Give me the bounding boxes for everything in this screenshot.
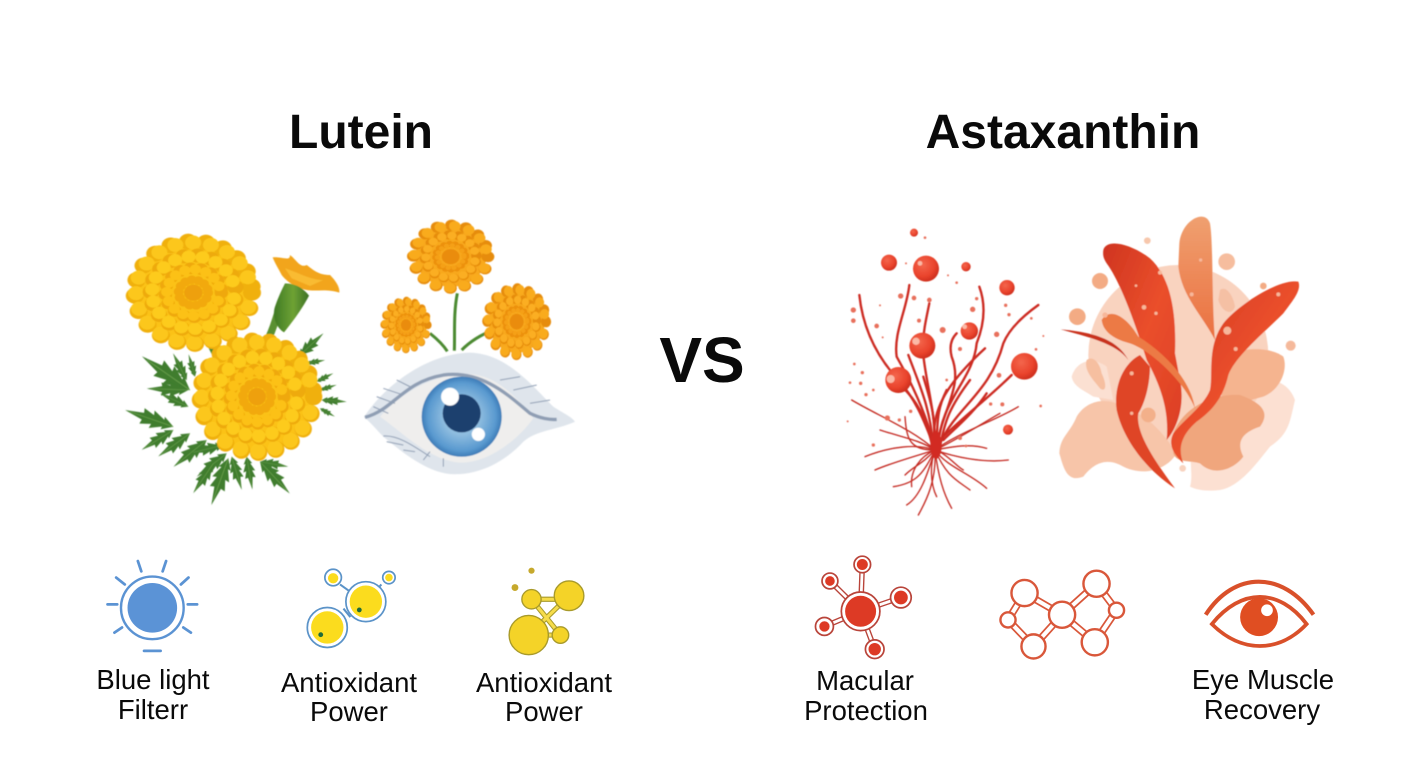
VS label: VS	[659, 324, 745, 396]
label: Macular	[816, 665, 914, 696]
label: Antioxidant	[281, 667, 417, 698]
peach background blobs	[1059, 265, 1295, 491]
benefit: antioxidant power (yellow molecule)	[476, 568, 612, 727]
label: Protection	[804, 695, 928, 726]
orange flowers	[384, 225, 546, 354]
root core	[930, 431, 942, 459]
lower red leaf	[1116, 355, 1175, 488]
right red leaf	[1171, 281, 1299, 463]
benefit: macular protection	[804, 556, 928, 726]
big red leaf	[1103, 244, 1182, 440]
label: Filterr	[118, 694, 188, 725]
icon: blue and yellow molecule	[307, 569, 395, 647]
iris	[422, 377, 502, 457]
label: Power	[505, 696, 583, 727]
benefit: antioxidant power (blue molecule)	[281, 569, 417, 727]
scattered droplets	[847, 236, 1044, 447]
label: Power	[310, 696, 388, 727]
label: Recovery	[1204, 694, 1320, 725]
upper vessels	[859, 285, 1038, 450]
benefit: blue light filter	[96, 561, 210, 725]
title: Astaxanthin: Astaxanthin	[926, 106, 1200, 159]
lower yellow flower	[200, 341, 314, 452]
label: Eye Muscle	[1192, 664, 1334, 695]
label: Antioxidant	[476, 667, 612, 698]
large yellow flower	[135, 241, 252, 344]
stems	[430, 293, 493, 351]
spheres	[881, 229, 1038, 435]
peach circles	[1069, 237, 1296, 472]
illustration: marigold bouquet	[122, 241, 347, 508]
icon: outlined red molecule	[1000, 571, 1124, 658]
highlights	[441, 388, 485, 441]
sphere highlights	[887, 261, 967, 383]
icon: sun	[108, 561, 197, 651]
illustration: red algae leaves on peach blobs	[1059, 217, 1299, 491]
eye white	[380, 374, 533, 463]
sinuous orange leaf	[1102, 314, 1195, 408]
lid line and lashes	[365, 374, 557, 467]
flower bud	[273, 255, 339, 332]
thin tail	[1061, 329, 1128, 360]
roots	[852, 400, 1018, 515]
title: Lutein: Lutein	[289, 106, 433, 159]
label: Blue light	[96, 664, 210, 695]
illustration: eye with orange flowers	[364, 225, 575, 474]
droplets on leaves	[1102, 258, 1280, 415]
icon: yellow molecule	[509, 568, 584, 655]
benefit: eye muscle recovery	[1192, 582, 1334, 725]
orange top leaf	[1178, 217, 1215, 340]
pupil	[443, 394, 481, 432]
eye lids	[364, 353, 575, 474]
marigold leaves	[122, 307, 347, 508]
icon: red hub molecule	[815, 556, 911, 658]
illustration: red vessels and spheres	[847, 229, 1044, 515]
icon: red eye	[1206, 582, 1313, 646]
